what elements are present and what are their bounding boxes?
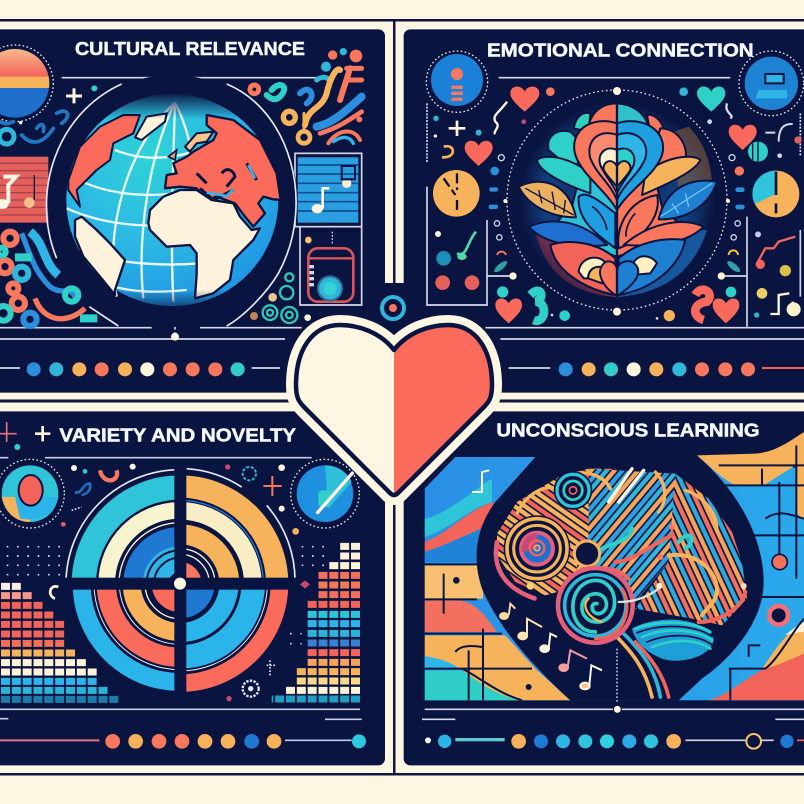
icon: radio player <box>300 227 362 305</box>
ring arcs <box>46 84 296 326</box>
panel: unconscious learning <box>404 411 804 765</box>
globe grid <box>67 103 213 302</box>
cluster lower left <box>435 221 509 290</box>
bar stack left <box>1 586 118 699</box>
cluster bottom <box>497 286 736 321</box>
concentric ring large <box>504 515 570 582</box>
progress dots <box>559 362 755 376</box>
bar stack right <box>272 546 360 699</box>
globe <box>66 93 281 307</box>
cluster lower right <box>726 221 801 318</box>
coral dash <box>797 738 804 743</box>
continent: greenland <box>135 113 167 140</box>
title: variety and novelty: VARIETY AND NOVELTY <box>59 424 297 445</box>
continent: south america <box>75 217 125 295</box>
progress dots <box>27 362 245 376</box>
music staff: coral <box>0 157 48 223</box>
corner sparkle <box>0 422 17 442</box>
waves left <box>425 479 492 537</box>
inland seas <box>197 163 257 200</box>
left fringe <box>496 542 535 599</box>
uk <box>168 150 177 160</box>
long leaves <box>537 157 590 193</box>
heart <box>296 325 492 495</box>
spiral <box>556 566 659 645</box>
hearts <box>465 86 757 323</box>
heart lobes <box>574 121 617 210</box>
swirls lower left <box>0 232 97 326</box>
divider lines <box>0 458 362 740</box>
progress dots <box>105 734 366 749</box>
panel: variety and novelty <box>0 411 385 765</box>
icon: plus <box>35 426 50 441</box>
dotted ring <box>507 90 727 310</box>
quadrant: bottom left <box>72 590 174 691</box>
icon: badge right <box>291 459 359 528</box>
cerebellum <box>632 620 714 661</box>
lower leaves <box>529 221 607 246</box>
upper side petals <box>548 131 589 170</box>
continent: eurasia <box>165 115 281 227</box>
divider lines <box>427 78 804 368</box>
title: unconscious learning: UNCONSCIOUS LEARNING <box>496 419 760 440</box>
icon: badge left <box>426 51 488 112</box>
icon: ring above heart <box>382 297 404 319</box>
title: cultural relevance: CULTURAL RELEVANCE <box>75 38 305 59</box>
ring nodes <box>503 87 730 316</box>
panel: cultural relevance <box>0 29 385 393</box>
progress dots <box>425 734 794 749</box>
dot grids <box>7 547 327 644</box>
top buds <box>589 103 617 132</box>
central leaves <box>579 195 615 248</box>
scandinavia <box>185 132 213 152</box>
swirls lower right <box>250 273 311 323</box>
connector dots <box>171 84 179 341</box>
small accents <box>14 444 310 701</box>
divider lines <box>422 709 804 740</box>
hills right <box>762 622 804 669</box>
icon: pie chart <box>752 171 799 217</box>
coral line <box>0 737 99 743</box>
coral line <box>762 365 804 371</box>
flower illustration <box>519 103 717 297</box>
icon: plus <box>66 88 82 103</box>
divider lines <box>0 78 325 368</box>
brain backdrop <box>477 457 764 700</box>
timeline node <box>613 705 621 713</box>
quadrant: bottom right <box>186 590 288 692</box>
icon: clock orange <box>433 170 480 217</box>
quadrant: top left <box>65 469 174 578</box>
music notes <box>500 604 602 689</box>
music staff: blue <box>295 153 362 227</box>
title: emotional connection: EMOTIONAL CONNECTION <box>487 40 754 61</box>
small accents <box>433 87 802 209</box>
continent: north america <box>68 115 140 207</box>
brain fill zones <box>497 469 747 625</box>
dotted stem line <box>615 649 619 704</box>
brain stem <box>615 634 669 697</box>
panel: emotional connection <box>404 29 804 393</box>
bottom buds <box>579 258 606 278</box>
nodes <box>527 582 534 590</box>
brain illustration <box>496 469 747 697</box>
globe backing ring <box>47 75 297 325</box>
icon: sunset badge <box>0 45 53 122</box>
tan leaf <box>519 182 576 217</box>
grid lines <box>425 445 804 700</box>
icon: badge left <box>0 459 64 528</box>
target chart <box>63 465 297 699</box>
icon: badge right <box>739 51 804 116</box>
continent: africa <box>148 190 260 298</box>
concentric ring top <box>554 471 592 510</box>
top arcs <box>517 472 717 530</box>
swirls upper left <box>0 85 97 144</box>
quadrant: top right <box>186 468 296 578</box>
centre connector block <box>384 283 406 395</box>
landscape artwork <box>425 432 804 700</box>
small ring centre <box>574 541 600 566</box>
swirls upper right <box>250 48 362 143</box>
art markers <box>453 577 460 584</box>
bands left <box>425 565 483 599</box>
filler under leaves <box>545 167 617 257</box>
blue leaf right <box>659 181 717 219</box>
orange hill top right <box>697 432 804 519</box>
globe shading <box>66 93 279 307</box>
